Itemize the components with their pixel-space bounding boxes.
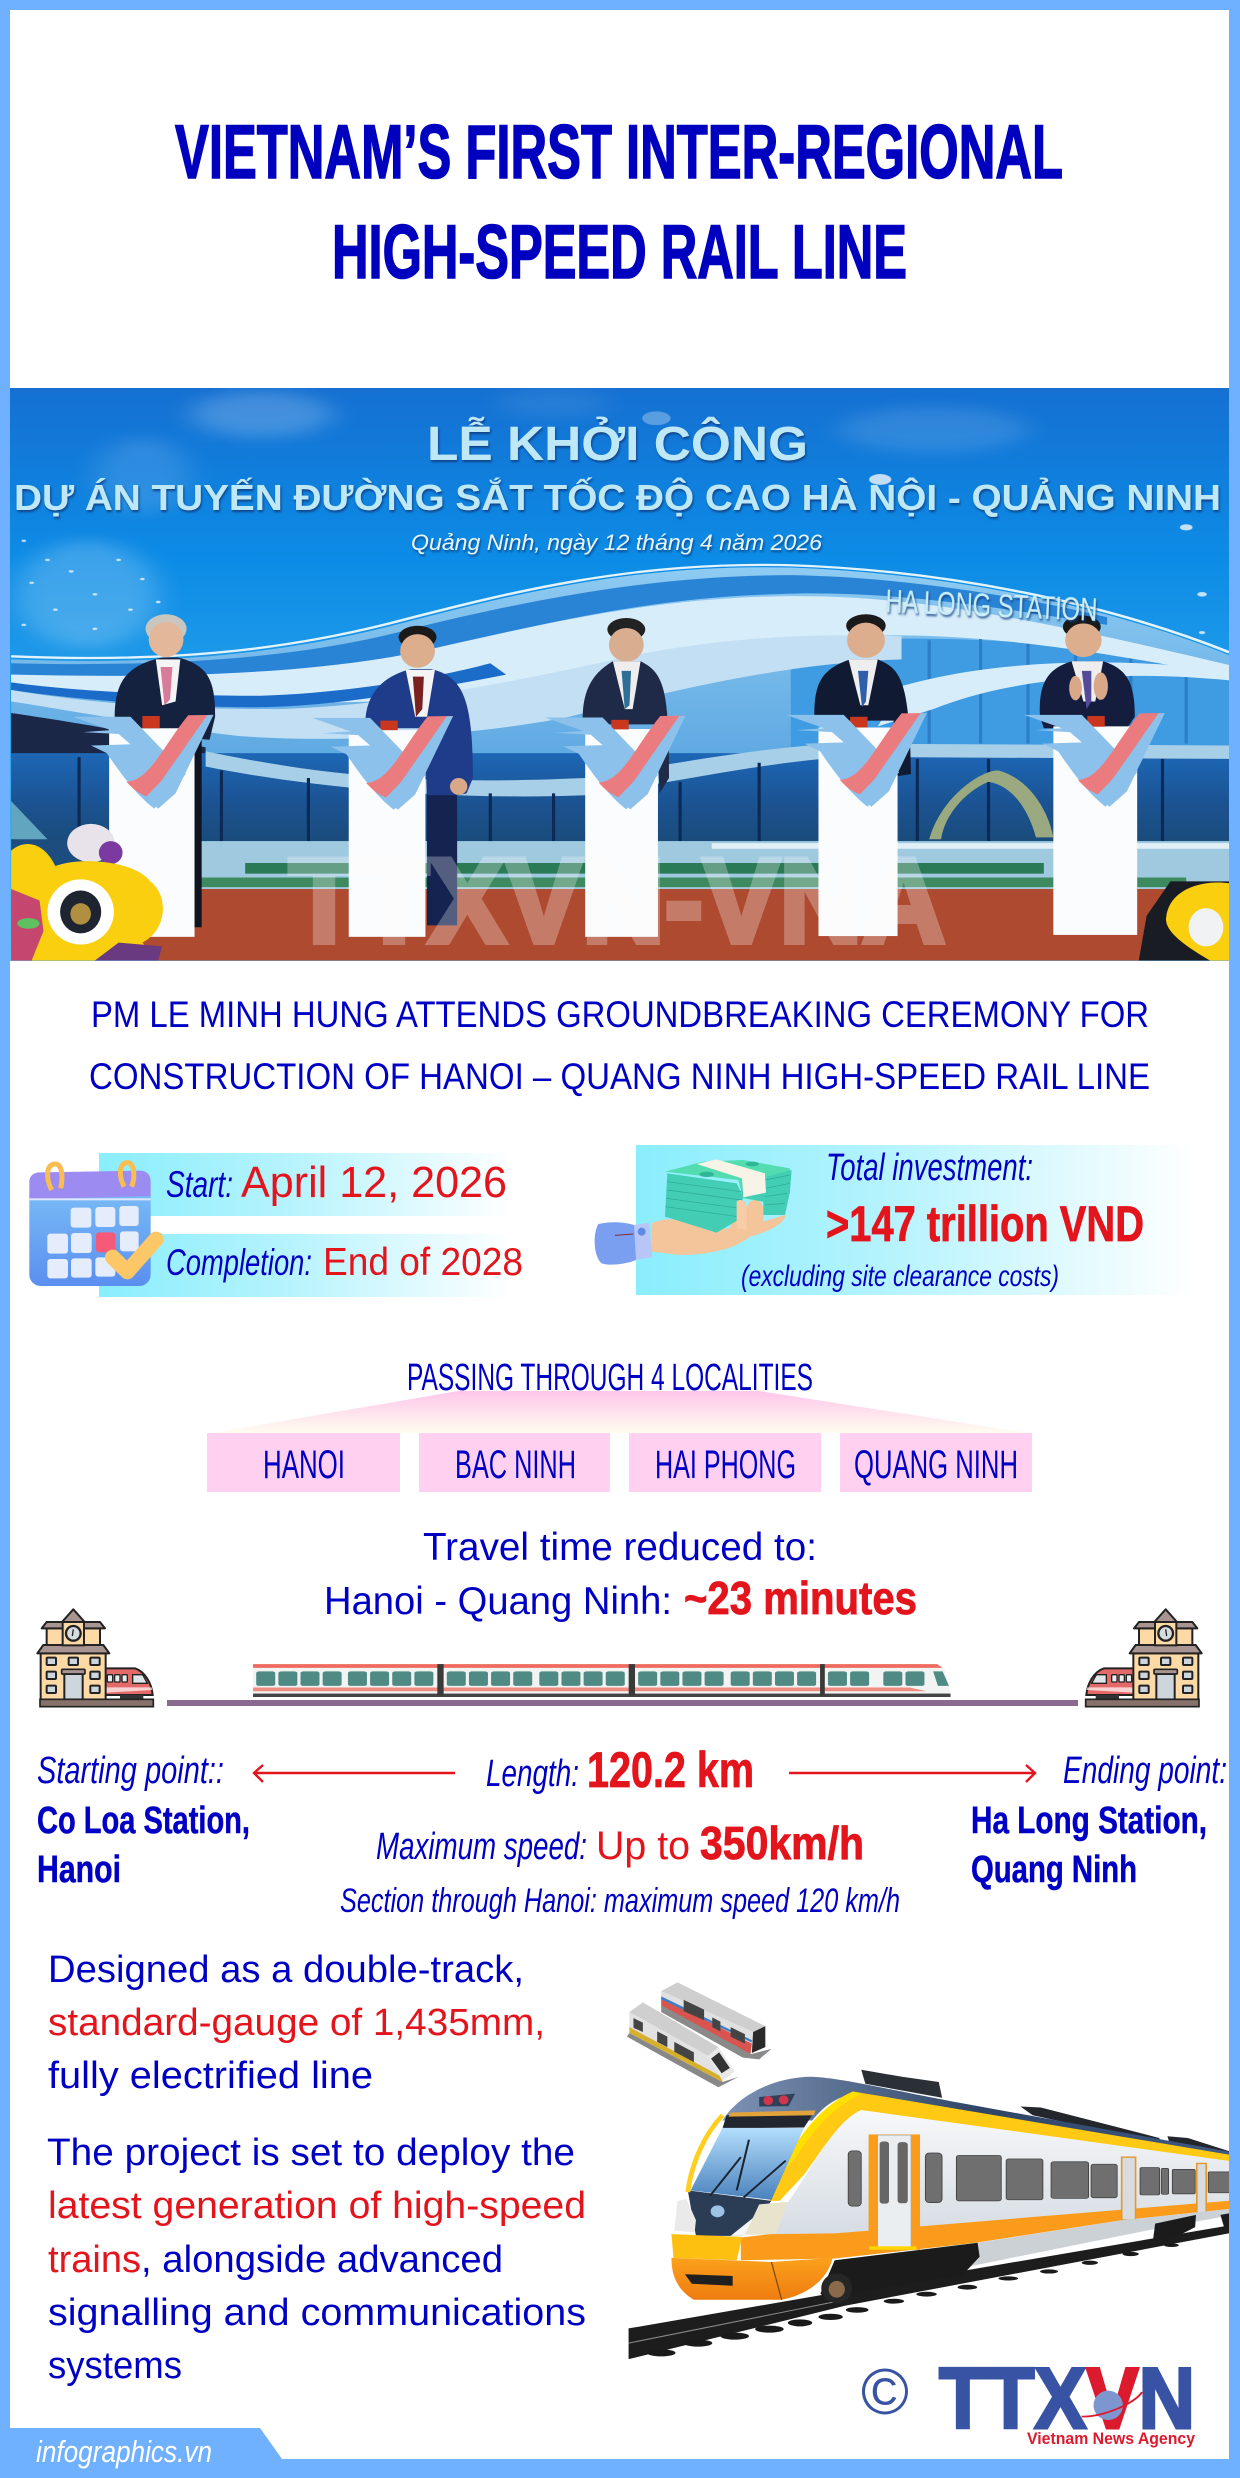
text block: rolling stock and systems: signalling and communications <box>48 2292 586 2334</box>
length <box>486 1742 754 1798</box>
ending point <box>971 1750 1227 1891</box>
panel: project dates <box>29 1153 523 1297</box>
panel: total investment <box>595 1145 1194 1295</box>
locality: Hai Phong: HAI PHONG <box>655 1443 796 1487</box>
icon: starting station <box>37 1609 153 1707</box>
length: Length: <box>486 1753 579 1795</box>
locality: Quang Ninh <box>840 1433 1032 1492</box>
starting point: Starting point:: <box>37 1750 224 1792</box>
title: HIGH-SPEED RAIL LINE <box>332 210 907 295</box>
fireworks <box>21 411 1207 634</box>
red carpet floor <box>11 889 1230 961</box>
panel: total investment: Total investment: <box>826 1147 1033 1189</box>
panel: groundbreaking ceremony photo: TTXVN-VNA <box>289 834 945 968</box>
travel time: Travel time reduced to: <box>423 1526 817 1569</box>
maximum speed: Up to <box>596 1824 690 1868</box>
panel: project dates: End of 2028 <box>323 1241 523 1284</box>
orange stripes <box>741 2200 1240 2260</box>
maximum speed: 350km/h <box>700 1817 864 1869</box>
icon: train on the route <box>253 1664 951 1697</box>
copyright symbol: © <box>861 2355 909 2428</box>
photo banner text <box>14 416 1221 628</box>
right-hand glazing <box>791 639 1230 749</box>
station roof waves <box>11 567 1230 755</box>
travel time: ~23 minutes <box>684 1572 917 1624</box>
rail track <box>167 1700 1078 1706</box>
text block: rolling stock and systems: latest generation of high-speed <box>48 2185 586 2227</box>
starting point <box>37 1750 250 1891</box>
text block: design <box>48 1949 545 2097</box>
starting point: Co Loa Station, <box>37 1800 250 1842</box>
panel: project dates: Completion: <box>166 1242 312 1283</box>
icon: hand holding money <box>595 1159 792 1265</box>
roof <box>722 2077 1240 2158</box>
text block: design: fully electrified line <box>48 2055 373 2097</box>
panel: total investment: >147 trillion VND <box>826 1196 1144 1252</box>
arrow: left to start <box>254 1765 455 1782</box>
text block: rolling stock and systems: systems <box>48 2345 182 2387</box>
icon: ending station <box>1086 1609 1202 1707</box>
panel: total investment: (excluding site clearance costs) <box>741 1260 1059 1293</box>
footer tab <box>10 2428 282 2469</box>
panel: groundbreaking ceremony photo <box>10 388 1230 968</box>
locality: Quang Ninh: QUANG NINH <box>854 1443 1018 1487</box>
maximum speed: Maximum speed: <box>376 1826 587 1868</box>
travel time: Hanoi - Quang Ninh: <box>324 1580 672 1623</box>
yellow band <box>769 2091 1240 2201</box>
text block: design: Designed as a double-track, <box>48 1949 524 1991</box>
locality: Bac Ninh <box>419 1433 610 1492</box>
logo: Vietnam News Agency: TTXVN <box>939 2351 1195 2447</box>
illustration: high-speed train <box>629 2070 1240 2359</box>
panel: project dates: Start: <box>166 1164 233 1205</box>
track <box>629 2224 1240 2359</box>
footer tab: infographics.vn <box>36 2434 212 2469</box>
length: 120.2 km <box>587 1742 754 1798</box>
lion dance heads <box>11 824 1230 961</box>
forecourt <box>11 841 1230 891</box>
maximum speed <box>340 1817 900 1920</box>
officials <box>115 614 1135 927</box>
locality: Hanoi <box>207 1433 400 1492</box>
photo banner text: HA LONG STATION <box>885 583 1098 628</box>
subheading <box>89 994 1150 1097</box>
arrow: right to end <box>789 1765 1035 1782</box>
text block: design: standard-gauge of 1,435mm, <box>48 2002 545 2044</box>
text block: rolling stock and systems: The project is set to deploy the <box>47 2132 575 2174</box>
locality: Hanoi: HANOI <box>263 1443 345 1487</box>
windscreen and cab <box>722 2112 814 2129</box>
maximum speed: Section through Hanoi: maximum speed 120 km/h <box>340 1882 900 1920</box>
panel: localities <box>207 1357 1032 1492</box>
undercarriage <box>965 2208 1240 2267</box>
panel: project dates: April 12, 2026 <box>241 1158 507 1207</box>
logo: Vietnam News Agency: Vietnam News Agency <box>1027 2429 1195 2448</box>
photo banner text: LỄ KHỞI CÔNG <box>427 416 808 471</box>
travel time <box>324 1526 917 1624</box>
panel: localities: PASSING THROUGH 4 LOCALITIES <box>407 1357 813 1399</box>
locality: Bac Ninh: BAC NINH <box>455 1443 576 1487</box>
photo banner text: DỰ ÁN TUYẾN ĐƯỜNG SẮT TỐC ĐỘ CAO HÀ NỘI - QUẢNG NINH <box>14 476 1221 518</box>
icon: calendar <box>29 1163 156 1286</box>
text block: rolling stock and systems: , alongside advanced <box>141 2239 503 2281</box>
photo banner text: Quảng Ninh, ngày 12 tháng 4 năm 2026 <box>411 530 823 555</box>
ending point: Quang Ninh <box>971 1849 1137 1891</box>
silver body <box>771 2110 1240 2238</box>
icon: small isometric trains <box>627 1982 771 2087</box>
text block: rolling stock and systems: trains <box>48 2239 141 2281</box>
starting point: Hanoi <box>37 1849 121 1891</box>
text block: rolling stock and systems <box>47 2132 586 2387</box>
roof equipment <box>861 2070 942 2098</box>
locality: Hai Phong <box>629 1433 821 1492</box>
podiums <box>109 726 1137 937</box>
windows <box>848 2151 1240 2206</box>
title <box>175 110 1063 295</box>
doors <box>869 2134 920 2250</box>
glass facade <box>11 753 1230 841</box>
